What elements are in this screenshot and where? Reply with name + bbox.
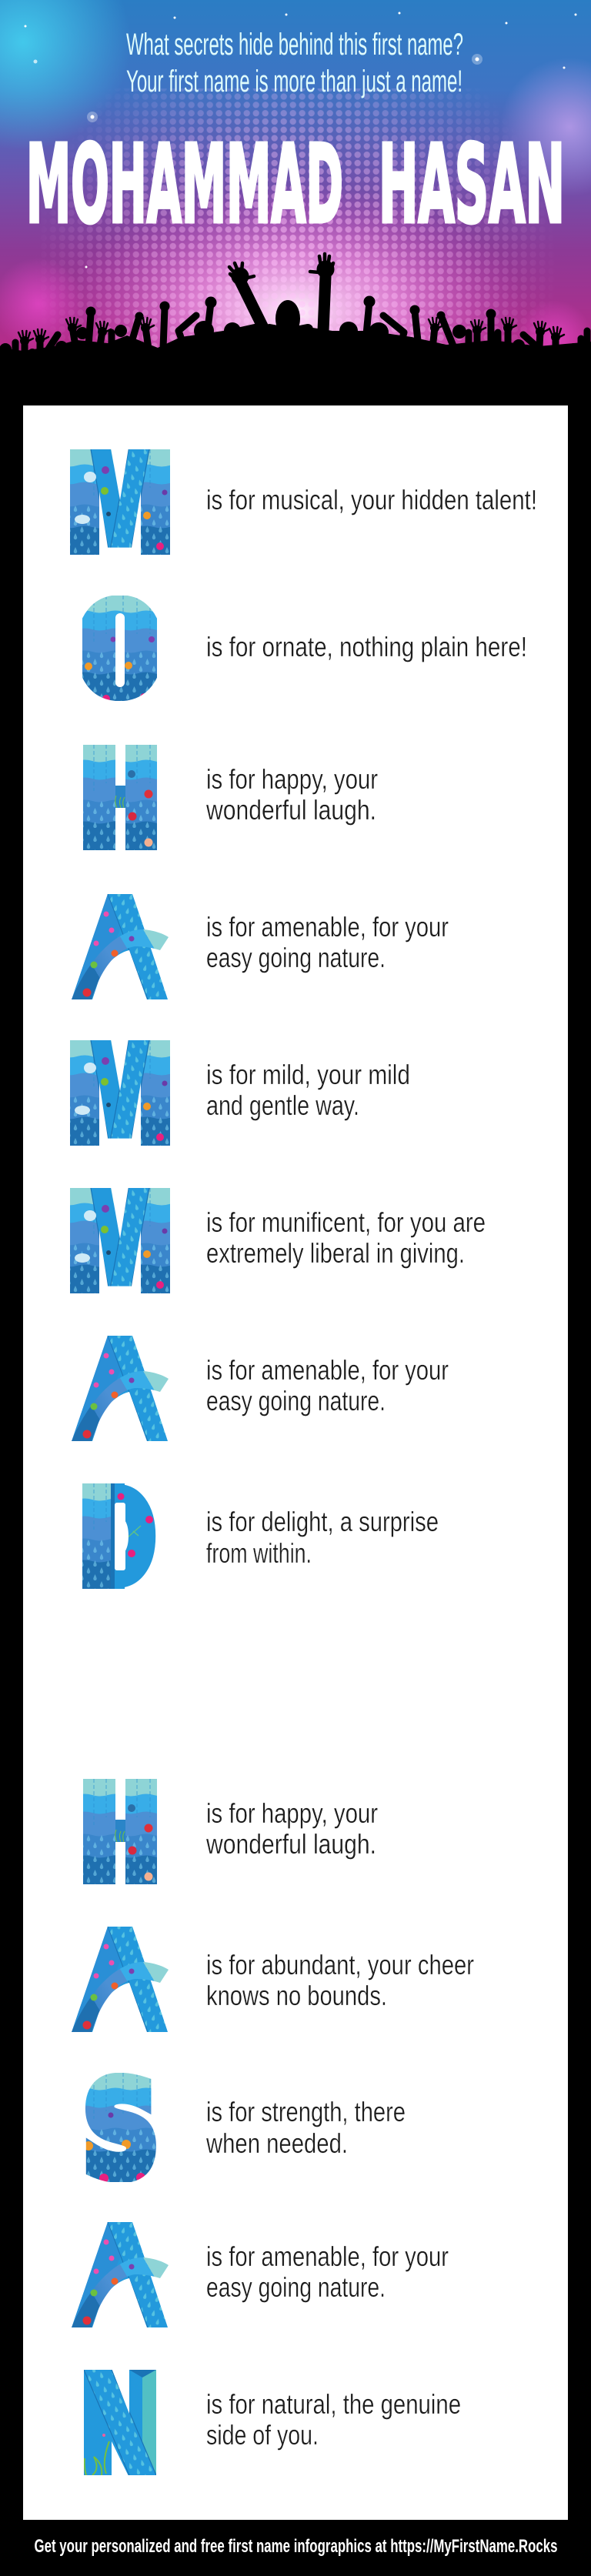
text: amenable: is for amenable, for your — [206, 911, 449, 943]
text: happy: is for happy, your — [206, 1797, 378, 1829]
row: letter S strength: when needed. — [205, 2127, 348, 2159]
text: ornate: is for ornate, nothing plain here! — [206, 631, 527, 662]
text: munificent: is for munificent, for you are — [206, 1206, 486, 1238]
row: letter N natural: side of you. — [206, 2419, 319, 2451]
text: mild: is for mild, your mild — [206, 1059, 410, 1090]
row: letter H happy — [83, 745, 378, 850]
text: abundant: is for abundant, your cheer — [206, 1949, 474, 1980]
row: letter A amenable: easy going nature. — [206, 942, 386, 973]
row: letter M mild — [70, 1040, 409, 1146]
row: letter N natural — [84, 2370, 460, 2475]
row: letter M musical — [70, 449, 536, 555]
text: happy: is for happy, your — [206, 763, 378, 795]
row: letter M munificent — [70, 1188, 485, 1293]
row: letter A amenable — [72, 894, 449, 999]
icon: letter M — [70, 1188, 170, 1293]
text: amenable: is for amenable, for your — [206, 2241, 449, 2272]
icon: letter M — [70, 449, 170, 555]
row: letter A amenable second — [72, 1336, 449, 1441]
panel: header stage background — [0, 0, 591, 351]
text: delight: is for delight, a surprise — [206, 1506, 439, 1537]
row: letter O ornate — [82, 596, 525, 701]
icon: letter O — [82, 596, 157, 701]
icon: letter M — [70, 1040, 170, 1146]
icon: letter A — [72, 894, 169, 999]
row: letter A amenable third — [72, 2222, 449, 2327]
panel: white content card — [23, 405, 568, 2520]
icon: letter N — [84, 2370, 156, 2475]
row: letter D delight: from within. — [206, 1537, 312, 1569]
illustration: crowd silhouette — [0, 254, 591, 405]
row: letter A amenable third: easy going nature. — [206, 2271, 386, 2303]
icon: letter S — [85, 2073, 156, 2182]
text: strength: is for strength, there — [206, 2096, 406, 2127]
icon: letter A — [72, 1927, 169, 2032]
row: letter S strength — [85, 2073, 405, 2182]
row: letter H happy: wonderful laugh. — [205, 794, 376, 826]
icon: letter A — [72, 1336, 169, 1441]
row: letter H happy second — [83, 1779, 378, 1884]
row: letter M munificent: extremely liberal in giving. — [206, 1237, 465, 1269]
icon: letter D — [82, 1483, 155, 1589]
row: letter H happy second: wonderful laugh. — [205, 1828, 376, 1860]
header question text — [126, 28, 463, 98]
icon: letter H — [83, 745, 157, 850]
row: letter A amenable second: easy going nature. — [206, 1385, 386, 1416]
text: natural: is for natural, the genuine — [206, 2388, 461, 2420]
row: letter M mild: and gentle way. — [206, 1089, 359, 1121]
row: letter A abundant — [72, 1927, 474, 2032]
text: amenable: is for amenable, for your — [206, 1354, 449, 1386]
row: letter D delight — [82, 1483, 438, 1589]
row: letter A abundant: knows no bounds. — [206, 1980, 387, 2011]
icon: letter H — [83, 1779, 157, 1884]
icon: letter A — [72, 2222, 169, 2327]
